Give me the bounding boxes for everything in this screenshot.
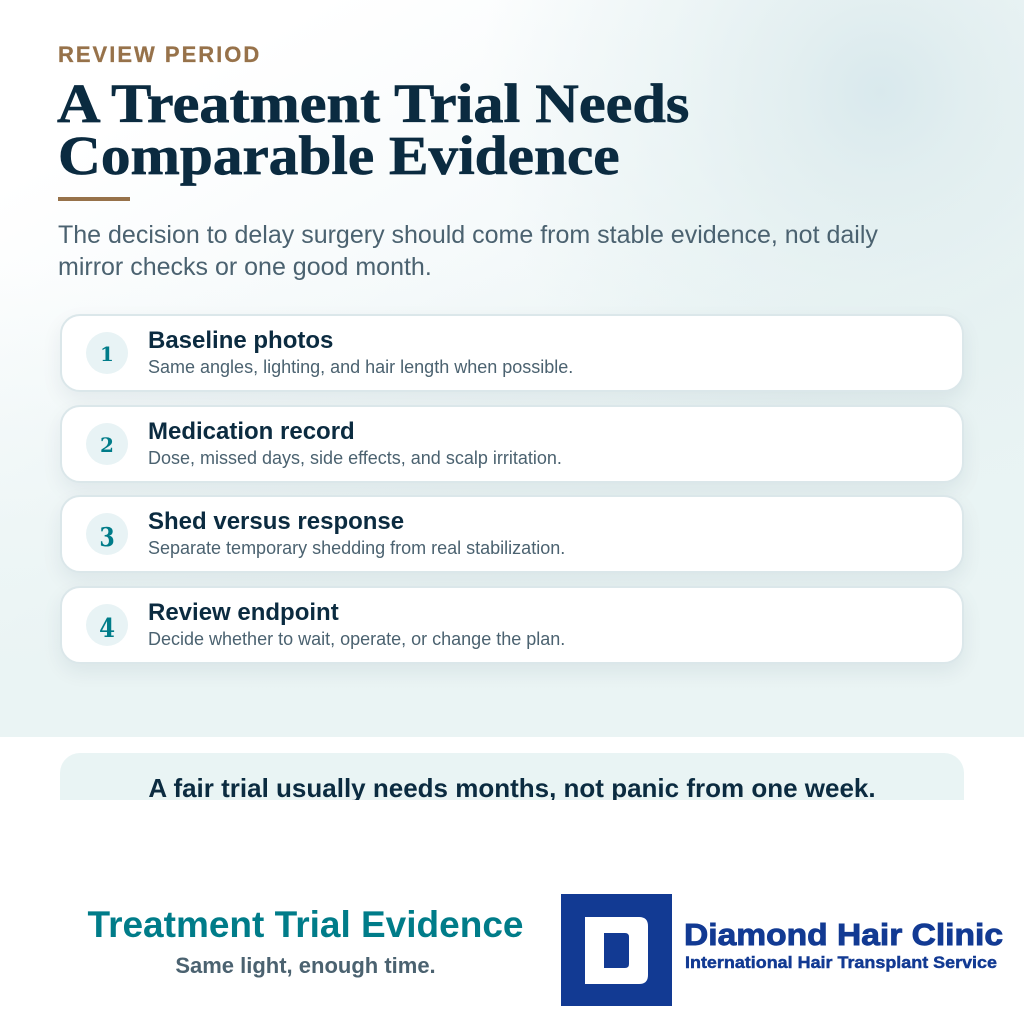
logo mark	[561, 894, 672, 1006]
decorative glow top right	[0, 0, 1024, 737]
card 2 heading: Medication record	[148, 418, 355, 445]
logo: Diamond Hair Clinic	[561, 894, 1003, 1006]
number badge 1: 1	[100, 342, 114, 366]
card 4: review endpoint	[60, 586, 964, 664]
logo name: Diamond Hair Clinic	[684, 917, 1003, 952]
callout: fair trial note	[60, 753, 964, 800]
title line 2: Comparable Evidence	[58, 125, 620, 186]
card 2 description: Dose, missed days, side effects, and scalp irritation.	[148, 448, 562, 468]
number badge 1	[86, 332, 128, 374]
footer title: Treatment Trial Evidence	[88, 904, 523, 945]
card 1 heading: Baseline photos	[148, 327, 333, 354]
eyebrow label: REVIEW PERIOD	[58, 42, 261, 67]
card 3: shed versus response	[60, 495, 964, 573]
card 1 description: Same angles, lighting, and hair length when possible.	[148, 357, 573, 377]
panel: hero background	[0, 0, 1024, 737]
title underline accent	[58, 197, 130, 201]
card 3 description: Separate temporary shedding from real stabilization.	[148, 538, 565, 558]
card 1: baseline photos	[60, 314, 964, 392]
logo tagline: International Hair Transplant Service	[685, 954, 997, 972]
number badge 2: 2	[100, 433, 114, 457]
number badge 4: 4	[99, 614, 115, 644]
card 2: medication record	[60, 405, 964, 483]
title line 1: A Treatment Trial Needs	[57, 73, 689, 134]
card 3 heading: Shed versus response	[148, 508, 404, 535]
intro paragraph: The decision to delay surgery should come from stable evidence, not daily mirror checks or one good month.	[58, 221, 878, 281]
footer subtitle: Same light, enough time.	[175, 953, 436, 978]
card 4 description: Decide whether to wait, operate, or change the plan.	[148, 629, 565, 649]
number badge 4	[86, 604, 128, 646]
number badge 2	[86, 423, 128, 465]
card 4 heading: Review endpoint	[148, 599, 339, 626]
number badge 3: 3	[99, 523, 115, 553]
number badge 3	[86, 513, 128, 555]
